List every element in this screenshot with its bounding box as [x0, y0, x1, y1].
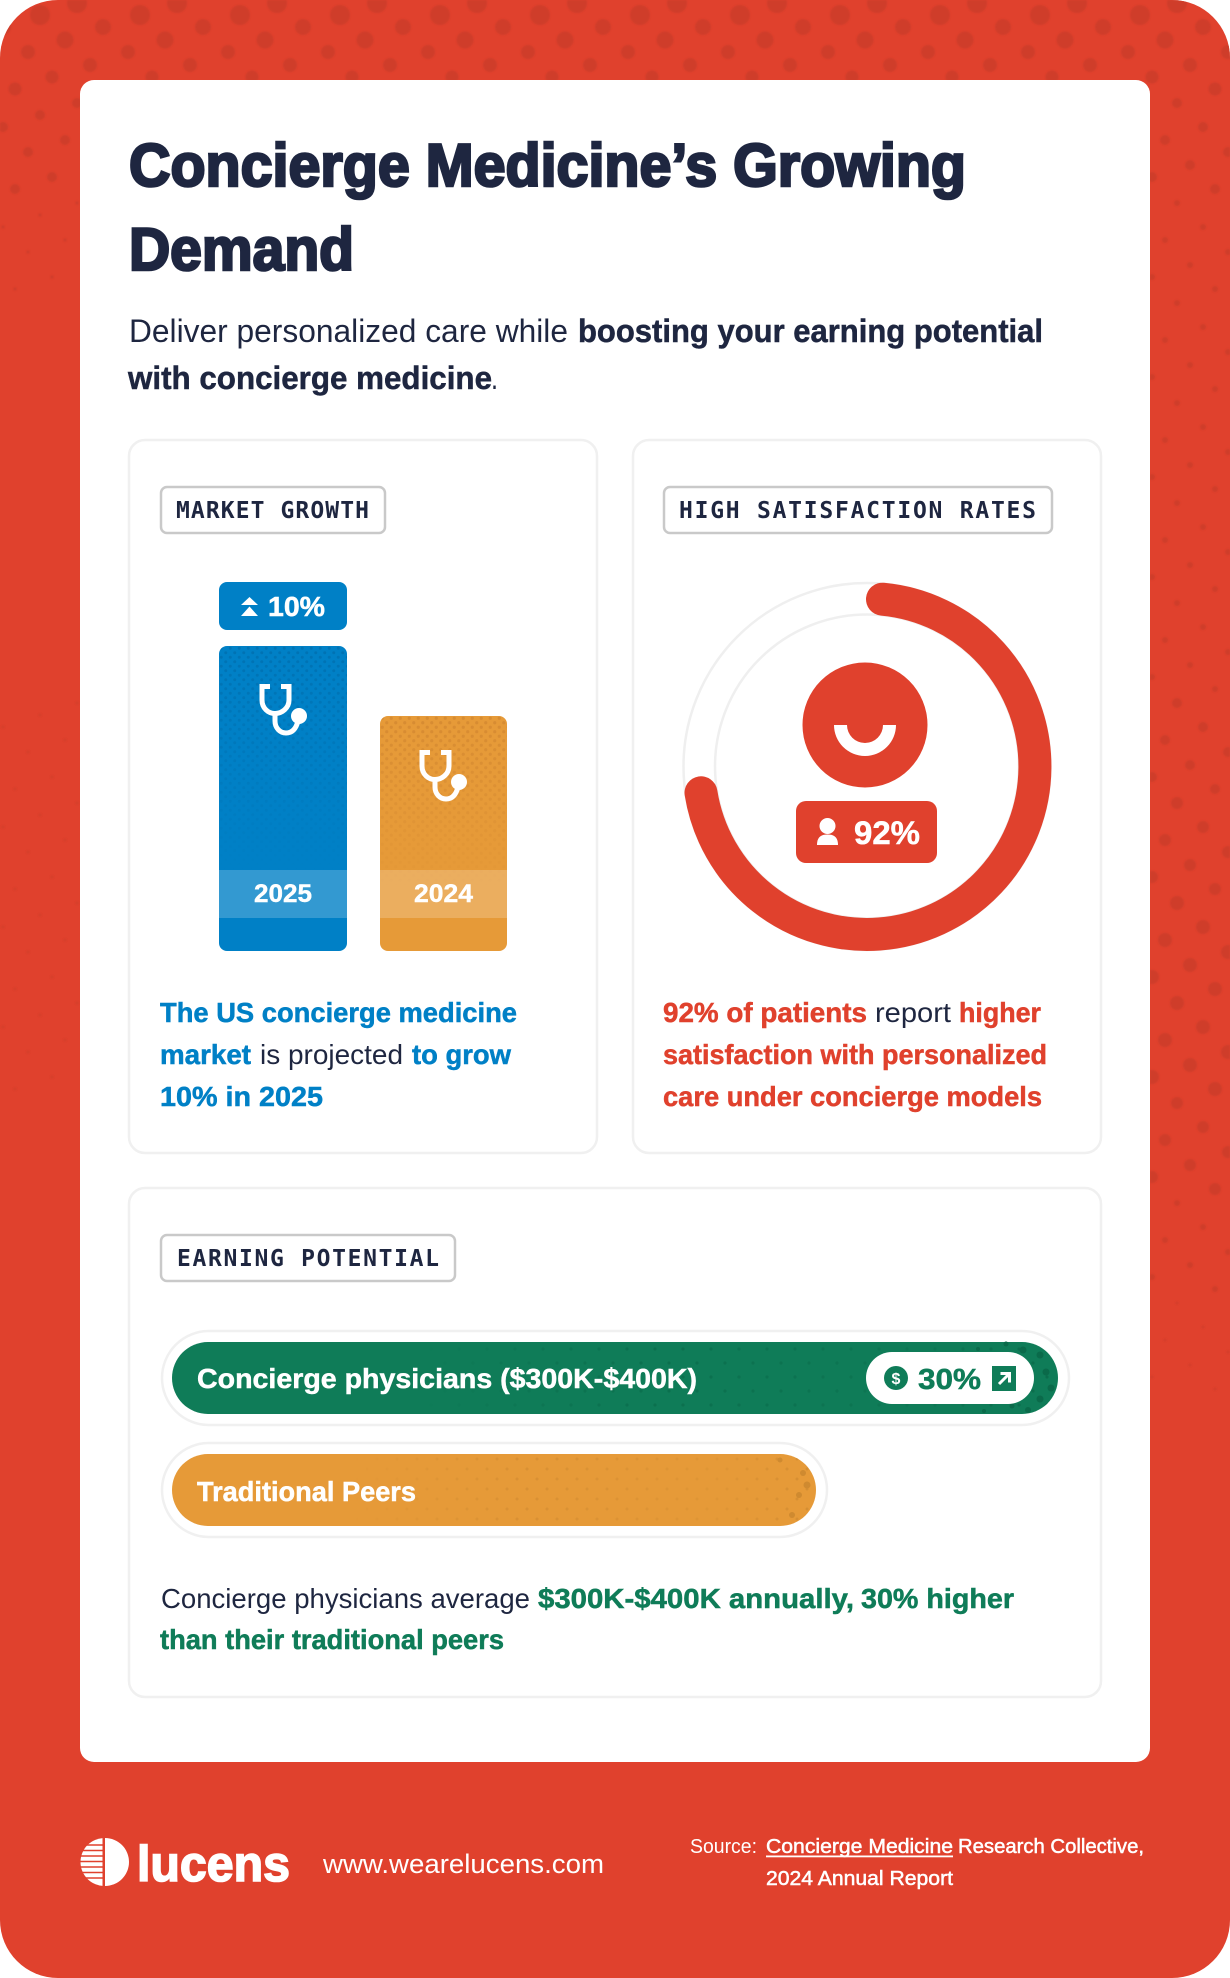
badge: market growth: [161, 487, 385, 533]
title: Concierge Medicine’s Growing: [129, 132, 966, 199]
satisfaction caption: 92% of patients: [663, 997, 867, 1028]
growth pill 10%: [219, 582, 347, 630]
badge: earning potential: EARNING POTENTIAL: [177, 1246, 439, 1272]
earning potential caption: [160, 1583, 1014, 1655]
panel: earning potential: [129, 1188, 1101, 1697]
market growth caption: 10% in 2025: [160, 1081, 323, 1112]
badge: earning potential: [161, 1235, 455, 1281]
panel: high satisfaction rates: [633, 440, 1101, 1153]
icon: dollar: $: [892, 1371, 901, 1388]
icon: person: [817, 818, 838, 845]
bar 2024: [380, 716, 507, 951]
source note: Research Collective,: [958, 1836, 1144, 1858]
website url: www.wearelucens.com: [322, 1849, 604, 1879]
bar: traditional peers: Traditional Peers: [197, 1476, 416, 1507]
subtitle: Deliver personalized care while: [129, 313, 568, 349]
earning potential caption: 30% higher: [861, 1583, 1014, 1614]
main white card: [80, 80, 1150, 1762]
satisfaction caption: report: [875, 997, 951, 1028]
panel: market growth: [129, 440, 597, 1153]
icon: striped half circle: [80, 1838, 129, 1886]
icon: smiley face: [802, 662, 928, 788]
satisfaction caption: [663, 997, 1047, 1112]
satisfaction caption: higher: [959, 997, 1041, 1028]
source note: Concierge Medicine: [766, 1836, 953, 1858]
bar 2025: 2025: [254, 880, 312, 908]
title: Demand: [129, 216, 354, 283]
pill 92%: 92%: [854, 815, 920, 851]
earning potential caption: than their traditional peers: [160, 1624, 504, 1655]
bar 2025: [219, 646, 347, 951]
subtitle: boosting your earning potential: [578, 313, 1043, 349]
bar: traditional peers: [162, 1443, 827, 1537]
market growth caption: market: [160, 1039, 251, 1070]
icon: arrow box: [992, 1366, 1016, 1391]
pill 92%: [796, 801, 937, 863]
market growth caption: [160, 997, 517, 1112]
title: [129, 132, 966, 283]
market growth caption: The US concierge medicine: [160, 997, 517, 1028]
source note: 2024 Annual Report: [766, 1868, 953, 1890]
pill 30%: [866, 1352, 1034, 1404]
source note: [690, 1836, 1144, 1890]
badge: high satisfaction rates: HIGH SATISFACTION RATES: [679, 498, 1036, 524]
logo: lucens: [80, 1838, 289, 1886]
satisfaction caption: care under concierge models: [663, 1081, 1042, 1112]
source note: Source:: [690, 1836, 757, 1858]
bar 2024: 2024: [414, 880, 473, 908]
market growth caption: is projected: [260, 1039, 403, 1070]
bar: concierge physicians: Concierge physicians ($300K-$400K): [197, 1363, 697, 1394]
earning potential caption: Concierge physicians average: [161, 1583, 530, 1614]
subtitle: [127, 313, 1043, 396]
earning potential caption: $300K-$400K annually,: [538, 1583, 854, 1614]
logo: lucens: lucens: [137, 1836, 290, 1892]
donut chart 92%: [684, 583, 1050, 950]
icon: stethoscope: [422, 752, 467, 799]
subtitle: .: [491, 360, 498, 396]
badge: high satisfaction rates: [664, 487, 1052, 533]
growth pill 10%: 10%: [268, 591, 325, 622]
market growth caption: to grow: [412, 1039, 511, 1070]
satisfaction caption: satisfaction with personalized: [663, 1039, 1047, 1070]
icon: stethoscope: [262, 686, 307, 733]
badge: market growth: MARKET GROWTH: [176, 498, 369, 524]
bar: concierge physicians: [162, 1331, 1069, 1425]
subtitle: with concierge medicine: [127, 360, 492, 396]
icon: dollar: [884, 1366, 908, 1390]
pill 30%: 30%: [918, 1364, 981, 1396]
